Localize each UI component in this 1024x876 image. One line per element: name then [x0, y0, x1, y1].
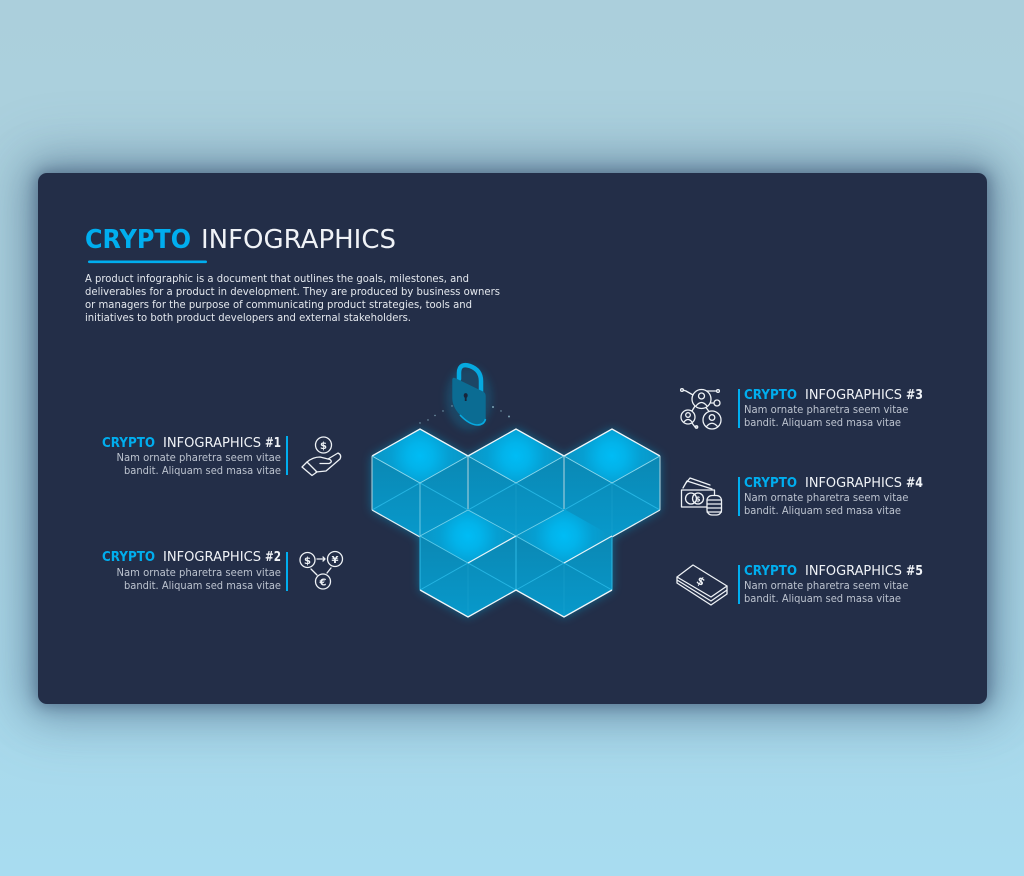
item 4 bar [738, 477, 740, 516]
icon: padlock [419, 365, 510, 430]
title underline [88, 260, 207, 263]
back cube edges [372, 429, 660, 537]
title: INFOGRAPHICS [201, 225, 396, 255]
item 1 text: #1 [265, 436, 281, 451]
item 1 text: INFOGRAPHICS [163, 436, 261, 451]
title [85, 225, 396, 255]
icon: currency exchange: $ [304, 556, 311, 567]
item 1 text [102, 436, 281, 477]
icon: hand holding coin: $ [320, 441, 327, 452]
item 4 text: INFOGRAPHICS [805, 476, 902, 491]
item 2 bar [286, 552, 288, 591]
item 2 text: #2 [265, 550, 281, 565]
item 2 text: CRYPTO [102, 550, 155, 565]
icon: currency exchange: € [319, 578, 327, 588]
front cube edges [420, 510, 612, 617]
item 2 text: Nam ornate pharetra seem vitae [116, 567, 281, 579]
item 2 text [102, 550, 281, 592]
cube: back middle [468, 429, 564, 537]
item 1 bar [286, 436, 288, 475]
item 4 icon: banknotes and coins: $ [696, 496, 701, 504]
item 5 text [744, 564, 923, 605]
item 4 text: bandit. Aliquam sed masa vitae [744, 505, 901, 517]
item 4 text: Nam ornate pharetra seem vitae [744, 492, 908, 504]
item 5 text: Nam ornate pharetra seem vitae [744, 580, 908, 592]
item 5 bar [738, 565, 740, 604]
title: CRYPTO [85, 225, 191, 255]
item 5 icon: stack of cash [677, 565, 727, 605]
icon: currency exchange [300, 552, 342, 589]
item 3 bar [738, 389, 740, 428]
item 3 text: INFOGRAPHICS [805, 388, 902, 403]
intro paragraph: A product infographic is a document that outlines the goals, milestones, and [85, 273, 469, 285]
icon: currency exchange: ¥ [332, 555, 339, 566]
intro paragraph: initiatives to both product developers and external stakeholders. [85, 312, 411, 324]
item 5 text: bandit. Aliquam sed masa vitae [744, 593, 901, 605]
item 3 text: Nam ornate pharetra seem vitae [744, 404, 908, 416]
item 4 text: #4 [906, 476, 923, 491]
cube: front left [420, 509, 516, 617]
item 1 text: bandit. Aliquam sed masa vitae [124, 465, 281, 477]
item 5 icon: stack of cash: $ [694, 574, 707, 589]
intro paragraph: deliverables for a product in development. They are produced by business owners [85, 286, 500, 298]
item 5 text: INFOGRAPHICS [805, 564, 902, 579]
item 3 text: bandit. Aliquam sed masa vitae [744, 417, 901, 429]
item 3 text: CRYPTO [744, 388, 797, 403]
item 1 text: CRYPTO [102, 436, 155, 451]
cube: back right [564, 429, 660, 537]
icon: hand holding coin [302, 437, 341, 476]
item 2 text: INFOGRAPHICS [163, 550, 261, 565]
item 1 text: Nam ornate pharetra seem vitae [116, 452, 281, 464]
item 3 text: #3 [906, 388, 923, 403]
item 4 text: CRYPTO [744, 476, 797, 491]
item 5 text: CRYPTO [744, 564, 797, 579]
intro paragraph [85, 273, 500, 324]
panel: main dark card [38, 173, 987, 704]
intro paragraph: or managers for the purpose of communicating product strategies, tools and [85, 299, 472, 311]
cube cluster [372, 429, 660, 617]
item 4 text [744, 476, 923, 517]
cube: front right [516, 509, 612, 617]
item 5 text: #5 [906, 564, 923, 579]
cube: back left [372, 429, 468, 537]
item 4 icon: banknotes and coins [682, 478, 722, 515]
item 3 icon: network of people [681, 389, 721, 429]
item 3 text [744, 388, 923, 429]
item 2 text: bandit. Aliquam sed masa vitae [124, 580, 281, 592]
